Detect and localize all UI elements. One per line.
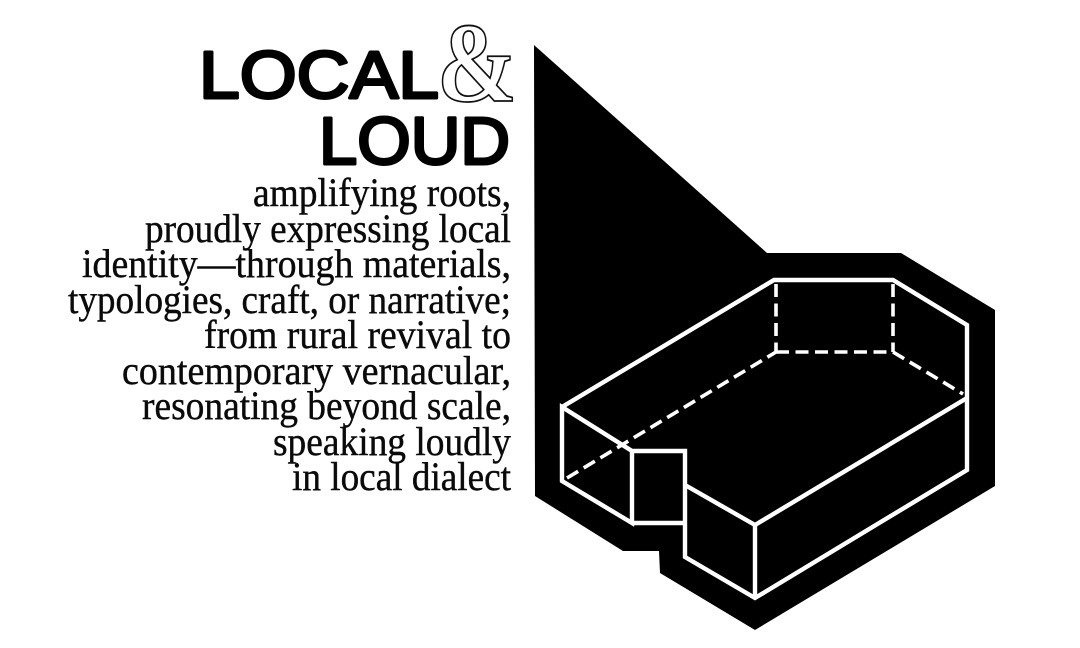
title xyxy=(199,1,517,179)
description text block: speaking loudly xyxy=(273,419,511,464)
title ampersand: & xyxy=(437,1,517,126)
description text block: amplifying roots, xyxy=(253,170,511,215)
description text block: resonating beyond scale, xyxy=(142,383,511,428)
title word: LOCAL: LOCAL xyxy=(199,38,439,113)
description text block: in local dialect xyxy=(292,454,511,499)
description text block: from rural revival to xyxy=(204,312,511,357)
black silhouette with shadow xyxy=(534,45,995,630)
description text block: identity—through materials, xyxy=(82,241,511,286)
solid white building outlines xyxy=(562,280,967,598)
description text block: typologies, craft, or narrative; xyxy=(68,277,511,322)
description text block: proudly expressing local xyxy=(145,206,511,251)
title word: LOUD: LOUD xyxy=(319,104,510,179)
isometric building icon xyxy=(534,45,995,630)
description text block xyxy=(68,170,511,499)
dashed hidden edges xyxy=(567,284,963,478)
description text block: contemporary vernacular, xyxy=(122,348,511,393)
